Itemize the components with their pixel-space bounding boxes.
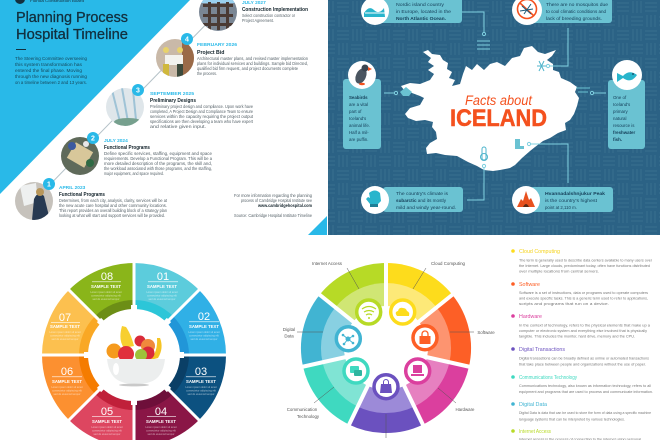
- wheel labels: Internet Access: [312, 261, 343, 266]
- card: highest peak: point at 2,110 m.: [545, 205, 577, 210]
- blue diagonal background: [0, 0, 190, 194]
- segment 07: Lorem ipsum dolor sit amet: [49, 330, 81, 334]
- segment 04: consectetur adipiscing elit: [146, 428, 176, 432]
- intro text: entered the final phase. Moving: [15, 68, 83, 73]
- item: software: scripts and programs that run on a device.: [519, 302, 609, 306]
- icon: fruit bowl: [106, 326, 165, 386]
- segment 02: 02: [198, 311, 210, 323]
- card: island location: North Atlantic Ocean.: [396, 16, 446, 21]
- segment 07: [49, 312, 81, 341]
- segment 08: sed do eiusmod tempor: [92, 297, 120, 301]
- step: July 2024: major equipment, and space required.: [104, 171, 164, 176]
- icon: cloud: [391, 300, 415, 324]
- segment 02: SAMPLE TEXT: [189, 324, 219, 329]
- segment 01: consectetur adipiscing elit: [147, 294, 177, 298]
- step: February 2026: Architectural master plans, and revised master implementation: [197, 56, 309, 61]
- segment 03: sed do eiusmod tempor: [187, 392, 215, 396]
- step: July 2027: Select construction contractor or: [242, 13, 296, 18]
- segment 06: sed do eiusmod tempor: [53, 392, 81, 396]
- intro text: on a timeline between 2 and 13 years.: [15, 80, 87, 85]
- item: hardware: computer or electronic system and everything else involved that is physically: [519, 329, 647, 333]
- segment 01: Lorem ipsum dolor sit amet: [146, 290, 178, 294]
- step: April 2023: APRIL 2023: [59, 185, 86, 191]
- icon: network: [336, 327, 360, 351]
- outer segments: [301, 263, 471, 433]
- connector lines: [384, 12, 606, 200]
- segment 02: consectetur adipiscing elit: [189, 334, 219, 338]
- item: software: Software is a set of instructions, data or programs used to operate computers: [519, 291, 648, 295]
- item: digital data: [511, 402, 651, 422]
- wheel labels: Communication: [287, 407, 318, 412]
- item: hardware: tangible. This includes the monitor, hard drive, memory and the CPU.: [519, 334, 635, 338]
- segment 04: 04: [155, 406, 167, 418]
- panel: fruit wheel: [34, 255, 234, 440]
- map title: Facts about: [465, 93, 533, 108]
- step: July 2027: Project Agreement.: [242, 18, 274, 23]
- segment 04: Lorem ipsum dolor sit amet: [145, 425, 177, 429]
- card: seabirds: Iceland's: [349, 116, 367, 121]
- inner darker band: [79, 300, 189, 410]
- segment 07: 07: [59, 312, 71, 324]
- segment 05: 05: [101, 406, 113, 418]
- item: software: and execute specific tasks. This is a generic term used to refer to applications,: [519, 296, 648, 300]
- step: April 2023: [59, 185, 168, 218]
- card: seabirds: [343, 61, 381, 149]
- intro text: [15, 56, 88, 85]
- item: software: Software: [519, 282, 540, 288]
- step: September 2025: Preliminary Designs: [150, 98, 196, 104]
- card: fish: freshwater: [613, 130, 635, 135]
- title: Planning Process: [16, 10, 128, 26]
- segment 01: SAMPLE TEXT: [147, 284, 177, 289]
- step: July 2027: Construction Implementation: [242, 7, 308, 13]
- item: internet access: [511, 429, 641, 440]
- wheel labels: Technology: [297, 414, 320, 419]
- title: [16, 10, 128, 43]
- segment gaps: [297, 258, 475, 429]
- wheel labels: [283, 261, 495, 419]
- item: digital transactions: [511, 347, 649, 366]
- segment 06: 06: [61, 366, 73, 378]
- more information note: Source: Cambridge Hospital Institute Timeline: [234, 213, 313, 218]
- card: fish: Iceland's: [613, 102, 631, 107]
- step: February 2026: qualified bid firm request, and project documents complete: [197, 66, 299, 71]
- segment 08: consectetur adipiscing elit: [91, 294, 121, 298]
- card: fish: [608, 60, 645, 149]
- centre hole: [344, 306, 428, 390]
- segment 08: SAMPLE TEXT: [91, 284, 121, 289]
- segment 06: Lorem ipsum dolor sit amet: [51, 385, 83, 389]
- segment 03: SAMPLE TEXT: [186, 379, 216, 384]
- item: software: [511, 282, 648, 306]
- card: island location: in Europe, located in the: [396, 9, 452, 14]
- number badges: 4: [185, 36, 189, 44]
- segment 02: Lorem ipsum dolor sit amet: [188, 330, 220, 334]
- segment 02: sed do eiusmod tempor: [190, 337, 218, 341]
- panel: facts about Iceland: [328, 0, 660, 235]
- segment 04: [145, 406, 177, 436]
- segment 06: SAMPLE TEXT: [52, 379, 82, 384]
- step: July 2024: Functional Programs: [104, 145, 150, 151]
- step: September 2025: Preliminary project design and compliance. Upon work have: [150, 104, 254, 109]
- step: September 2025: and relative given input.: [150, 124, 206, 129]
- step: September 2025: [150, 91, 254, 129]
- more information note: process of Cambridge Hospital Institute see: [241, 198, 313, 203]
- segment 05: Lorem ipsum dolor sit amet: [91, 425, 123, 429]
- more information note: For more information regarding the planning: [234, 193, 313, 198]
- segment 03: [185, 366, 217, 396]
- intro text: through the new diagnosis running: [15, 74, 88, 79]
- card: climate: The country's climate is: [396, 191, 448, 196]
- wheel labels: Cloud Computing: [431, 261, 466, 266]
- timeline connector: [34, 12, 218, 201]
- card: seabirds: are a vital: [349, 102, 368, 107]
- item: digital data: Digital Data is data that can be used to store the form of data using a specific machine: [519, 411, 651, 415]
- card: fish: natural: [613, 116, 626, 121]
- card: mosquitoes: There are no mosquitos due: [546, 2, 609, 7]
- more information note: [234, 193, 313, 218]
- outer segments: [42, 263, 226, 440]
- item: cloud computing: The term is generally used to describe data centers available to many users over: [519, 258, 653, 262]
- wheel labels: Data: [284, 334, 294, 338]
- segment 07: sed do eiusmod tempor: [51, 337, 79, 341]
- photo 1: [15, 182, 53, 220]
- segment 03: consectetur adipiscing elit: [186, 388, 216, 392]
- wheel labels: Software: [477, 330, 495, 335]
- number badges: 3: [136, 88, 140, 94]
- number badges: [43, 33, 193, 190]
- item: digital transactions: Digital Transactions: [519, 347, 566, 353]
- inner lighter band: [321, 283, 451, 413]
- wheel labels: Digital: [283, 327, 295, 332]
- segment 05: sed do eiusmod tempor: [93, 432, 121, 436]
- step: September 2025: specifications are then developing a team who have expert: [150, 119, 254, 124]
- step: July 2027: JULY 2027: [242, 0, 266, 6]
- card: seabirds: Seabirds: [349, 95, 368, 100]
- item: communication technology: [511, 375, 653, 394]
- item: cloud computing: over multiple locations from central servers.: [519, 270, 599, 274]
- step: February 2026: the process.: [197, 71, 217, 76]
- item: cloud computing: [511, 249, 653, 274]
- card: seabirds: are puffin.: [349, 137, 368, 142]
- segment 05: SAMPLE TEXT: [92, 419, 122, 424]
- title: Hospital Timeline: [16, 27, 128, 43]
- step: February 2026: FEBRUARY 2026: [197, 42, 237, 48]
- icon: lock: [413, 326, 437, 350]
- map title: [451, 95, 546, 126]
- item: digital data: Digital Data: [519, 402, 547, 408]
- card: climate: mild and windy year-round.: [396, 205, 456, 210]
- icon: wifi: [357, 300, 381, 324]
- item: hardware: Hardware: [519, 314, 542, 320]
- intro text: The Steering Committee overseeing: [15, 56, 88, 61]
- item: digital data: language systems that can be interpreted by various technologies.: [519, 418, 625, 422]
- centre gear: [84, 305, 184, 405]
- card: mosquitoes: [512, 0, 612, 25]
- card: seabirds: animal life.: [349, 123, 370, 128]
- card: fish: primary: [613, 109, 628, 114]
- card: climate: subarctic and its mostly: [396, 198, 447, 203]
- segment 02: [188, 311, 220, 341]
- icon: chat: [344, 359, 368, 383]
- step: July 2024: requirements. Develop a Functional Program. This will be a: [104, 156, 213, 161]
- segment 04: SAMPLE TEXT: [146, 419, 176, 424]
- segment 03: 03: [195, 366, 207, 378]
- segment 08: Lorem ipsum dolor sit amet: [90, 290, 122, 294]
- card: fish: resource is: [613, 123, 635, 128]
- more information note: www.cambridgehospital.com: [257, 203, 312, 208]
- item: hardware: In the context of technology, refers to the physical elements that make up a: [519, 324, 651, 328]
- step: September 2025: services within the capacity requiring the project output: [150, 114, 254, 119]
- card: island location: [361, 0, 462, 25]
- card: highest peak: [512, 186, 613, 214]
- photo 4: [156, 39, 194, 77]
- item: hardware: [511, 314, 651, 338]
- card: highest peak: Hvannadalshnjukur Peak: [545, 191, 606, 196]
- step: July 2024: Define specific services, staffing, equipment and space: [104, 151, 213, 156]
- card: highest peak: is the country's highest: [545, 198, 598, 203]
- icon: laptop: [406, 359, 430, 383]
- step: July 2024: [104, 138, 213, 176]
- step: July 2027: [242, 0, 308, 23]
- segment 08: [90, 271, 122, 301]
- wheel labels: Hardware: [455, 407, 475, 412]
- item: internet access: Internet Access: [519, 429, 551, 435]
- item: communication technology: Communications Technology: [519, 375, 577, 381]
- number badges: 2: [91, 136, 95, 142]
- segment 05: [91, 406, 123, 436]
- header logo and organisation: [15, 0, 84, 4]
- card: island location: Nordic island country: [396, 2, 445, 7]
- step: April 2023: This report provides an overall building block of a strategy plan: [59, 208, 168, 213]
- item: digital transactions: that take place between people and organizations without the use of paper.: [519, 362, 646, 366]
- segment 04: sed do eiusmod tempor: [147, 432, 175, 436]
- step: July 2024: more detailed description of the programs, the skill and,: [104, 161, 212, 166]
- photo 2: [61, 137, 99, 175]
- segment 05: consectetur adipiscing elit: [92, 428, 122, 432]
- segment 06: consectetur adipiscing elit: [52, 388, 82, 392]
- map of Iceland: [401, 46, 579, 171]
- photo 5: [199, 0, 237, 31]
- intro text: this system transformation has: [15, 62, 83, 67]
- photo 3: [106, 88, 144, 126]
- segment 03: Lorem ipsum dolor sit amet: [185, 385, 217, 389]
- panel: digital technology wheel: [283, 258, 495, 438]
- panel: definitions list: [511, 249, 653, 440]
- step: April 2023: Determines, from each city, analysis, clarity, services will be at: [59, 198, 168, 203]
- step: July 2024: JULY 2024: [104, 138, 128, 144]
- step: September 2025: completed, A Project Design and Compliance Team to ensure: [150, 109, 254, 114]
- card: mosquitoes: lack of breeding grounds.: [546, 16, 602, 21]
- step: February 2026: Project Bid: [197, 50, 224, 56]
- map title: ICELAND: [450, 105, 547, 132]
- card: seabirds: part of: [349, 109, 362, 114]
- step: April 2023: looking at what will start and support services will be provided.: [59, 213, 165, 218]
- item: cloud computing: Cloud Computing: [519, 249, 560, 255]
- step: April 2023: the new acute care hospital and other community locations.: [59, 203, 167, 208]
- icon: shopping bag: [374, 375, 398, 399]
- item: communication technology: equipment and programs that are used to process and communicate information.: [519, 390, 653, 394]
- card: seabirds: Half a mil-: [349, 130, 369, 135]
- card: climate: [361, 186, 463, 214]
- step: April 2023: Functional Programs: [59, 192, 105, 198]
- blue corner triangle: [308, 216, 327, 235]
- card: fish: One of: [613, 95, 627, 100]
- step: February 2026: plans for individual services and buildings. Sample bid Directed,: [197, 61, 308, 66]
- item: digital transactions: Digital transactions can be broadly defined as online or automated transactions: [519, 356, 649, 360]
- segment 07: consectetur adipiscing elit: [50, 334, 80, 338]
- item: cloud computing: the Internet. Large clouds, predominant today, often have functions distributed: [519, 264, 650, 268]
- item: communication technology: Communications technology, also known as information technology, refers to all: [519, 384, 651, 388]
- segment 01: [146, 271, 178, 301]
- leader lines: [297, 268, 474, 438]
- step: September 2025: SEPTEMBER 2025: [150, 91, 194, 97]
- segment gaps: [34, 255, 234, 440]
- step: February 2026: [197, 42, 309, 76]
- card: fish: fish.: [613, 137, 622, 142]
- panel: hospital timeline: [0, 0, 327, 235]
- segment 01: sed do eiusmod tempor: [148, 297, 176, 301]
- segment 07: SAMPLE TEXT: [50, 324, 80, 329]
- segment 01: 01: [157, 271, 169, 283]
- step: July 2024: the workload associated with those programs, and the staffing,: [104, 166, 212, 171]
- map icons: [400, 41, 590, 160]
- segment 06: [51, 366, 83, 396]
- segment 08: 08: [101, 271, 113, 283]
- number badges: 1: [47, 182, 51, 188]
- card: mosquitoes: to cool climatic conditions and: [546, 9, 607, 14]
